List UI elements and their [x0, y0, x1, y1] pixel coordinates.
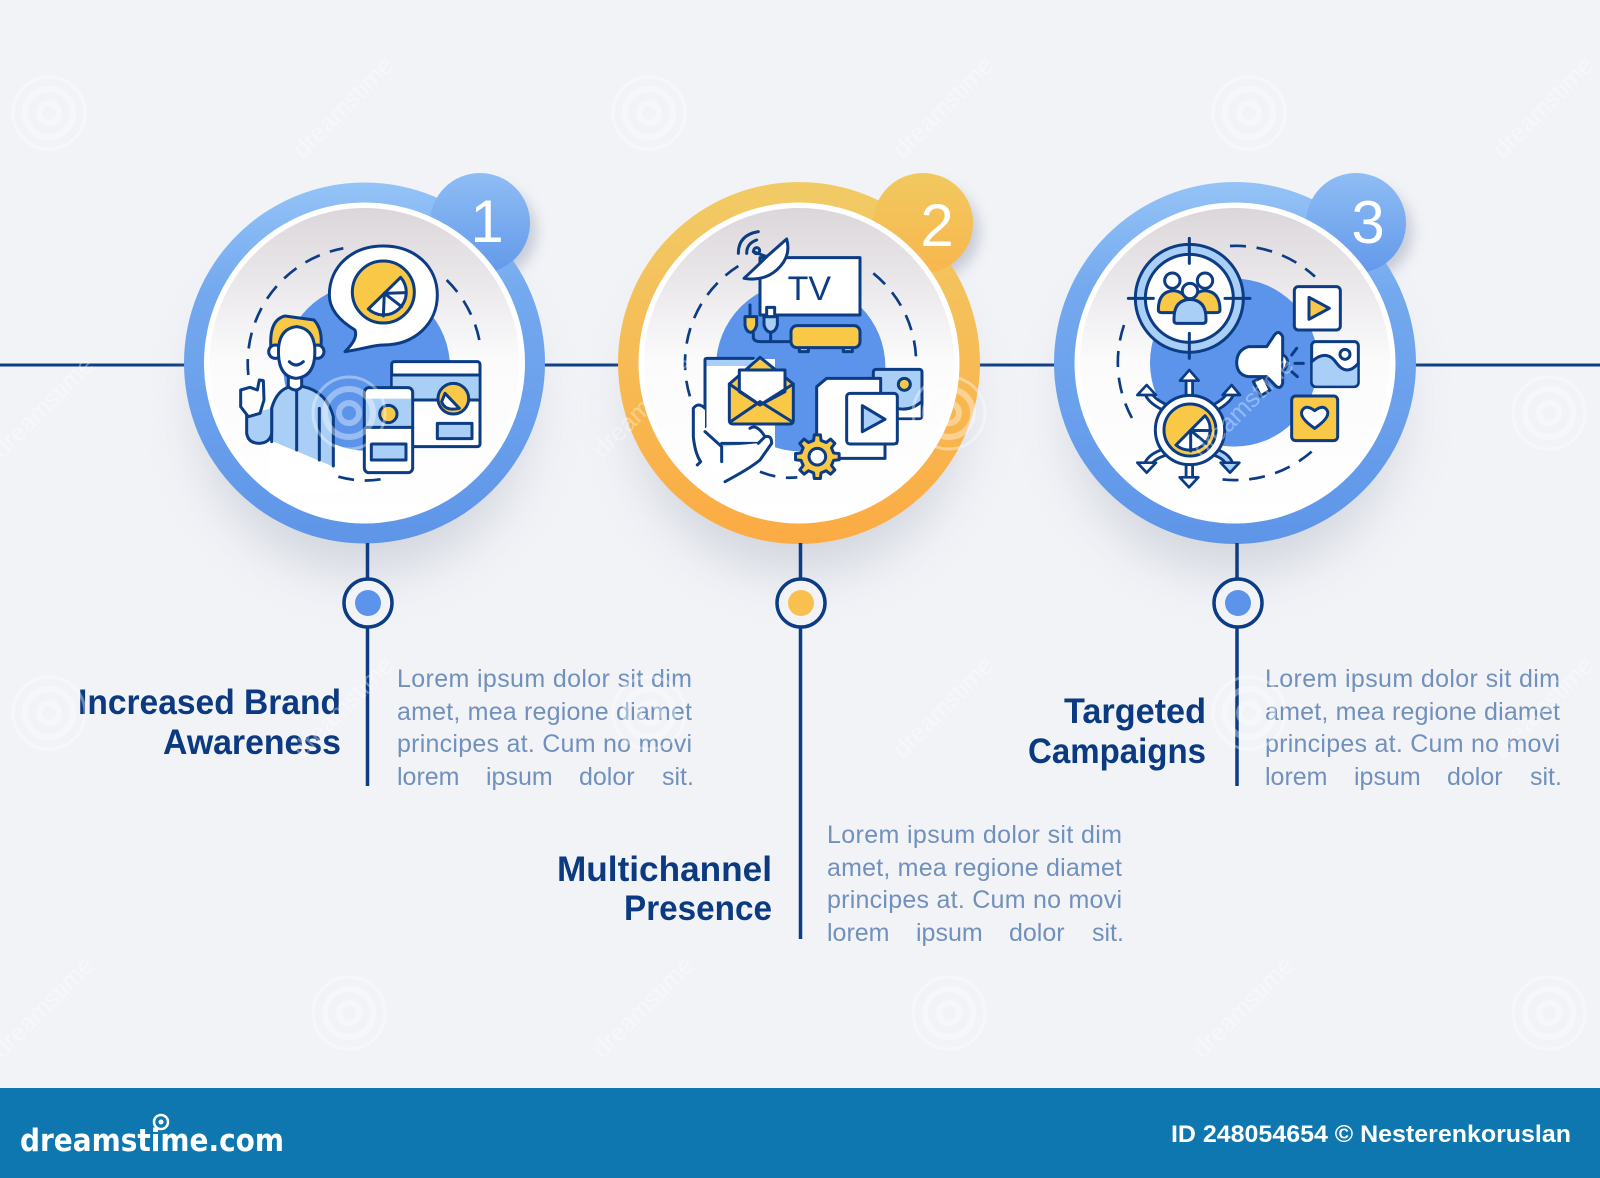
badge shadow 1 — [444, 186, 536, 278]
television: TV — [788, 270, 831, 308]
icon: targeted campaigns — [1118, 238, 1358, 487]
marker dot 1 — [344, 579, 392, 627]
watermark text: dreamstime — [1487, 51, 1599, 163]
watermark text: dreamstime — [1487, 651, 1599, 763]
inner disc 2 — [638, 202, 960, 524]
dashed arc — [248, 248, 479, 481]
ring 2 — [618, 182, 980, 544]
inner disc 1 — [204, 202, 525, 524]
marker dot 2 — [777, 579, 825, 627]
text block 1: dolor — [579, 763, 635, 791]
icon: multichannel — [685, 232, 922, 482]
connector: step 2 stem — [777, 543, 825, 939]
badge 3 — [1306, 173, 1406, 273]
text block 2: principes at. Cum no movi — [827, 886, 1122, 914]
watermark text: dreamstime — [587, 351, 699, 463]
inner disc 3 — [1074, 202, 1396, 524]
speech bubble — [329, 246, 437, 352]
watermark text: dreamstime — [1187, 351, 1299, 463]
text block 1: principes at. Cum no movi — [397, 730, 692, 758]
badge shadow 3 — [1320, 186, 1412, 278]
panel: step 3 — [1054, 173, 1416, 573]
heading: Targeted Campaigns: Targeted — [1064, 692, 1206, 731]
badge shadow 2 — [887, 186, 979, 278]
text block 1: sit. — [662, 763, 694, 791]
envelope — [729, 357, 793, 424]
heading: Multichannel Presence: Presence — [624, 889, 772, 928]
blue blob — [283, 284, 450, 451]
gear — [796, 435, 839, 478]
dashed arc — [685, 266, 916, 478]
text block 1 — [397, 665, 694, 791]
text block 2: sit. — [1092, 919, 1124, 947]
badge 1 — [430, 173, 530, 273]
number 3: 3 — [1351, 189, 1385, 256]
text block 2: ipsum — [916, 919, 983, 947]
heading: Multichannel Presence — [557, 850, 772, 928]
orange badge — [1155, 395, 1225, 465]
fade under person — [270, 440, 377, 493]
ring 3 — [1054, 182, 1416, 544]
document — [817, 378, 897, 458]
number 2: 2 — [920, 192, 954, 259]
watermark text: dreamstime — [287, 651, 399, 763]
text block 3: lorem — [1265, 763, 1328, 791]
blue blob — [1150, 279, 1318, 447]
connector: step 1 stem — [344, 543, 392, 786]
shadow 2 — [634, 243, 964, 573]
text block 3: amet, mea regione diamet — [1265, 698, 1560, 726]
footer bar — [0, 1088, 1600, 1178]
heading: Targeted Campaigns: Campaigns — [1028, 732, 1206, 771]
footer credit: ID 248054654 © Nesterenkoruslan — [1171, 1121, 1571, 1148]
dashed arc — [1118, 246, 1315, 480]
panel: step 2 — [618, 173, 980, 573]
heading: Increased Brand Awareness: Increased Brand — [78, 683, 341, 722]
phone — [364, 388, 413, 473]
blue blob — [716, 282, 885, 451]
phone in hand — [693, 358, 775, 482]
browser window — [392, 362, 480, 447]
text block 1: amet, mea regione diamet — [397, 698, 692, 726]
ring 1 — [184, 182, 545, 544]
heading: Multichannel Presence: Multichannel — [557, 850, 772, 889]
text block 3: ipsum — [1354, 763, 1421, 791]
plugs and cable — [745, 305, 791, 342]
text block 2 — [827, 821, 1124, 947]
number 1: 1 — [470, 188, 504, 255]
text block 3: principes at. Cum no movi — [1265, 730, 1560, 758]
marker dot 3 — [1214, 579, 1262, 627]
image card — [873, 369, 922, 419]
text block 1: lorem — [397, 763, 460, 791]
image card — [1312, 342, 1358, 387]
heading: Increased Brand Awareness — [78, 683, 341, 762]
target with people — [1128, 238, 1250, 358]
watermark text: dreamstime — [887, 651, 999, 763]
text block 1: ipsum — [486, 763, 553, 791]
heart card — [1292, 396, 1338, 441]
television — [760, 258, 860, 315]
watermark text: dreamstime — [587, 951, 699, 1063]
badge 2 — [873, 173, 973, 273]
watermark text: dreamstime — [287, 51, 399, 163]
shadow 3 — [1070, 243, 1400, 573]
watermark text: dreamstime — [887, 51, 999, 163]
text block 3 — [1265, 665, 1562, 791]
text block 3: dolor — [1447, 763, 1503, 791]
person — [241, 316, 333, 467]
satellite dish — [738, 232, 788, 279]
text block 2: Lorem ipsum dolor sit dim — [827, 821, 1122, 849]
footer logo: dreamstime.com — [20, 1123, 284, 1159]
megaphone — [1237, 332, 1303, 396]
set-top box — [791, 326, 860, 352]
text block 1: Lorem ipsum dolor sit dim — [397, 665, 692, 693]
shadow 1 — [199, 243, 529, 573]
connector: step 3 stem — [1214, 543, 1262, 786]
connector line: horizontal timeline — [0, 364, 1600, 366]
heading: Increased Brand Awareness: Awareness — [163, 723, 341, 762]
text block 3: sit. — [1530, 763, 1562, 791]
video card — [847, 393, 897, 444]
icon: brand awareness — [241, 246, 480, 493]
watermark text: dreamstime — [1187, 951, 1299, 1063]
radiating arrows — [1137, 370, 1240, 487]
heading: Targeted Campaigns — [1028, 692, 1206, 771]
text block 3: Lorem ipsum dolor sit dim — [1265, 665, 1560, 693]
panel: step 1 — [184, 173, 545, 573]
text block 2: amet, mea regione diamet — [827, 854, 1122, 882]
play card — [1294, 287, 1340, 330]
text block 2: dolor — [1009, 919, 1065, 947]
text block 2: lorem — [827, 919, 890, 947]
